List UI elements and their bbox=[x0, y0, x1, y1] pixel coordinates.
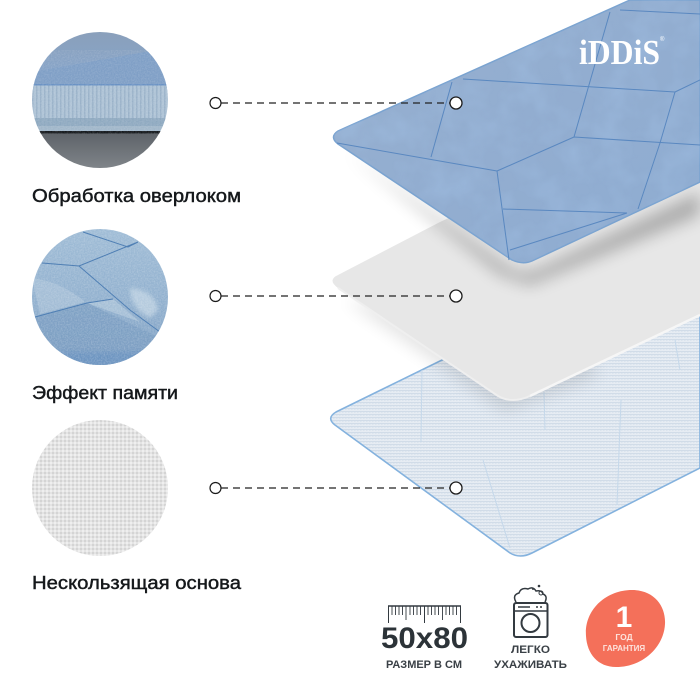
size caption: РАЗМЕР В СМ bbox=[386, 659, 462, 671]
callout line 3 bbox=[210, 482, 462, 494]
photo circle: non-slip base bbox=[32, 420, 168, 556]
care caption: ЛЕГКО bbox=[511, 644, 550, 656]
warranty badge: ГОД bbox=[615, 632, 633, 642]
size value: 50x80 bbox=[381, 622, 468, 655]
bottom non-slip mat layer bbox=[331, 240, 700, 556]
quilted seam lines bbox=[337, 10, 700, 260]
logo: IDDIS: iDDiS bbox=[579, 33, 660, 72]
warranty badge: 1 bbox=[616, 601, 632, 634]
icon: washing machine bbox=[514, 585, 548, 637]
label: memory: Эффект памяти bbox=[32, 382, 178, 403]
label: overlock: Обработка оверлоком bbox=[32, 185, 241, 206]
warranty badge bbox=[586, 590, 665, 667]
photo circle: overlock edge bbox=[32, 32, 168, 168]
care caption bbox=[494, 644, 567, 671]
photo circle: memory effect bbox=[32, 229, 168, 366]
callout line 2 bbox=[210, 290, 462, 302]
care caption: УХАЖИВАТЬ bbox=[494, 659, 567, 671]
icon: ruler bbox=[388, 606, 461, 623]
top blue mat layer bbox=[330, 0, 700, 285]
middle memory foam layer bbox=[332, 100, 700, 412]
warranty badge: ГАРАНТИЯ bbox=[603, 644, 645, 653]
label: non-slip: Нескользящая основа bbox=[32, 572, 242, 593]
callout line 1 bbox=[210, 97, 462, 109]
logo: IDDIS: ® bbox=[660, 36, 665, 43]
